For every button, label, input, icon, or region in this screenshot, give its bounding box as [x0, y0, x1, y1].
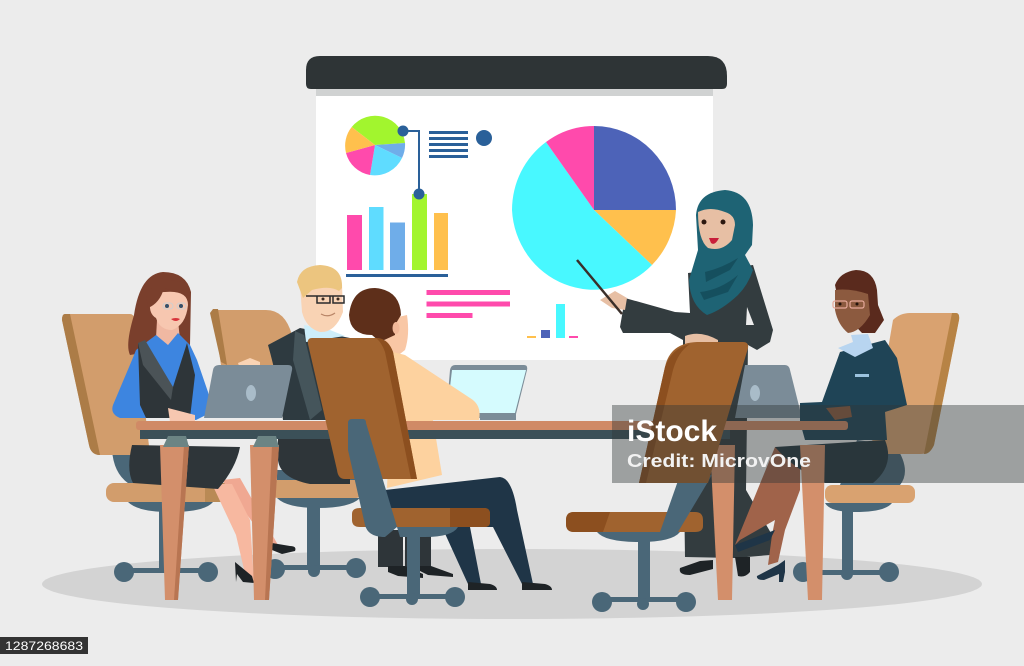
back shoe	[735, 530, 775, 552]
collar	[304, 325, 345, 342]
back leg	[222, 478, 278, 548]
hand and pointer	[600, 291, 627, 310]
table leg 3	[710, 445, 735, 600]
shoe	[757, 560, 785, 582]
hand	[826, 406, 852, 420]
watermark: credit line: Credit: MicrovOne	[627, 451, 811, 471]
hand	[168, 408, 195, 422]
table leg 1	[160, 445, 189, 600]
shoes	[272, 543, 295, 554]
chart: small bars	[527, 304, 578, 338]
legend dot	[476, 130, 492, 146]
chart: small pie chart	[345, 116, 405, 175]
hair	[835, 270, 884, 333]
image id tag	[0, 637, 88, 654]
person: man seen from behind	[349, 288, 552, 590]
watermark band	[612, 405, 1024, 483]
gap under arm	[746, 307, 754, 325]
pants	[385, 477, 533, 584]
neck	[385, 315, 408, 357]
skirt	[129, 445, 240, 489]
face	[698, 209, 735, 249]
shirt	[387, 352, 480, 488]
table	[136, 421, 848, 600]
pocket	[855, 374, 869, 377]
lower hand	[685, 334, 718, 345]
chart: bar chart	[346, 188, 448, 277]
chair: front left brown	[308, 338, 490, 607]
legs	[735, 447, 800, 565]
person: woman presenter in hijab	[577, 190, 775, 576]
chair: front right brown	[566, 342, 748, 612]
chair: left	[62, 314, 230, 582]
laptop: grey right	[735, 365, 802, 418]
person: woman in blue blouse	[112, 272, 295, 583]
blouse	[112, 333, 212, 420]
connector with dots	[398, 126, 419, 194]
floor shadow	[42, 549, 982, 619]
face	[300, 285, 343, 332]
torso	[268, 328, 350, 420]
skirt	[775, 440, 888, 483]
hair	[349, 288, 401, 342]
face	[150, 292, 188, 330]
chair: right	[793, 313, 959, 582]
shoes	[680, 560, 713, 575]
hair	[297, 265, 342, 298]
collar	[838, 334, 873, 357]
robe	[620, 265, 775, 558]
id number: 1287268683	[5, 639, 83, 653]
smile	[321, 313, 335, 316]
shoes	[388, 566, 423, 578]
table leg 2	[250, 445, 279, 600]
panel: projection screen	[306, 56, 727, 360]
text lines: pink	[426, 290, 510, 318]
vest	[138, 343, 195, 418]
front leg	[212, 484, 254, 582]
person: blond man in suit	[238, 265, 453, 578]
ear	[392, 322, 400, 334]
glasses	[306, 296, 344, 303]
legend lines	[429, 131, 468, 158]
person: woman in navy uniform	[735, 270, 907, 582]
hair fringe	[146, 278, 190, 308]
chart: large pie chart	[512, 126, 676, 290]
table leg 4	[800, 445, 825, 600]
chair: second left	[210, 309, 366, 579]
hair	[128, 272, 191, 355]
face	[835, 290, 870, 333]
lower body	[278, 438, 350, 484]
torso	[800, 340, 907, 440]
laptop: grey left	[204, 365, 292, 418]
watermark: iStock logo: iStock	[627, 415, 717, 448]
hand	[238, 358, 260, 369]
neck	[156, 320, 180, 350]
laptop: open screen	[446, 365, 527, 420]
hijab	[689, 190, 753, 315]
